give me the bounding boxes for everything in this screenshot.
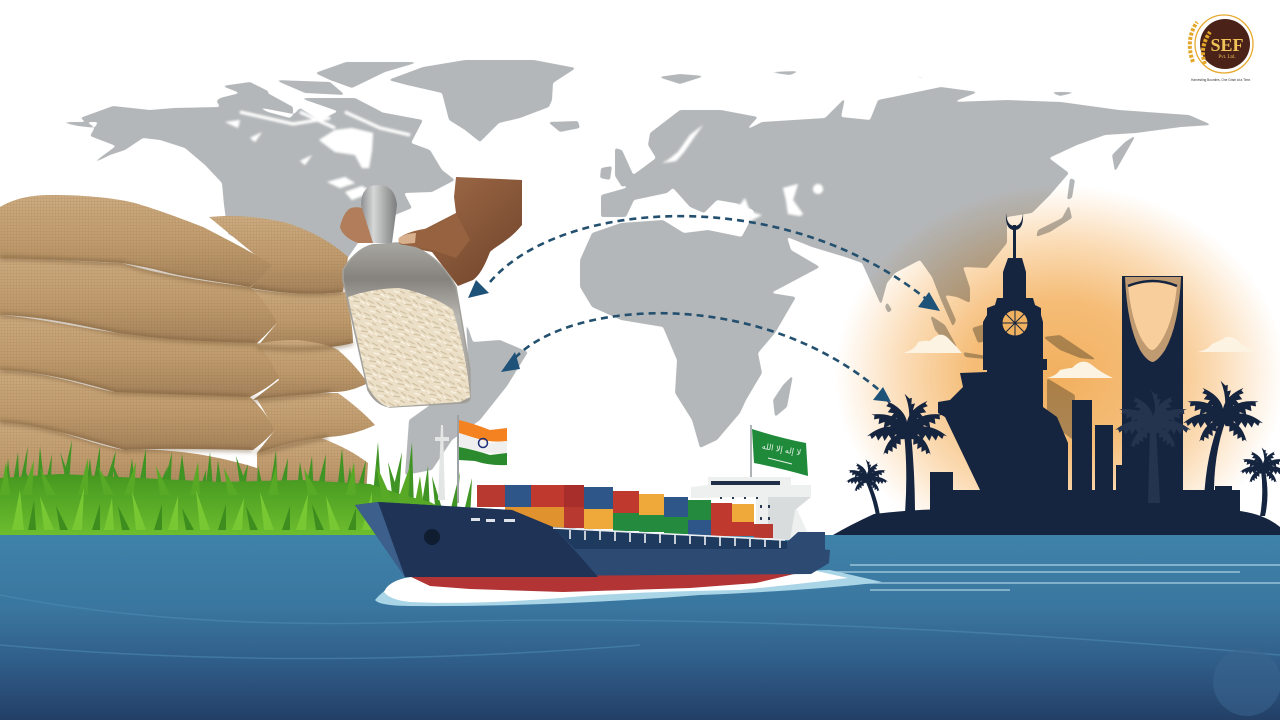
palm large left	[867, 394, 947, 513]
tagline: Harvesting Bounties, One Grain at a Time.	[1191, 78, 1251, 82]
superstructure	[691, 477, 811, 540]
tall blades	[4, 440, 472, 520]
left low block	[930, 472, 953, 510]
world map	[60, 60, 1212, 475]
hand back	[399, 177, 522, 286]
gold ring	[1195, 15, 1253, 73]
palm large right	[1183, 381, 1263, 500]
skyline	[833, 213, 1280, 535]
mast	[435, 425, 449, 500]
Baltic Sea	[662, 125, 703, 163]
wheat	[1190, 22, 1210, 64]
clouds	[903, 335, 1255, 378]
foam	[384, 570, 848, 603]
South America	[405, 322, 528, 475]
cloud left	[903, 335, 962, 353]
cloud middle	[1047, 362, 1113, 378]
Greenland	[388, 60, 576, 142]
Japan	[1036, 178, 1075, 237]
saudi flag	[751, 425, 808, 477]
short blades	[0, 458, 424, 508]
UK and Ireland	[600, 148, 636, 187]
ocean	[0, 535, 1280, 720]
Australia	[1047, 378, 1075, 440]
logo name: SEF	[1210, 35, 1244, 55]
palm small right	[1240, 447, 1280, 516]
grass lower blades	[12, 488, 402, 530]
wake lines	[830, 565, 1280, 590]
sack fold shadows	[0, 258, 353, 453]
sunset glow	[835, 185, 1280, 565]
North America	[60, 100, 455, 262]
Africa	[580, 220, 796, 448]
foam shadow	[375, 570, 882, 606]
Arctic islands	[216, 62, 419, 114]
grass	[0, 440, 472, 535]
arrowhead right upper	[918, 292, 940, 311]
scoop handle	[361, 185, 397, 243]
rice sacks	[0, 195, 375, 495]
palm in tower	[1115, 390, 1191, 503]
Black Sea	[721, 198, 762, 221]
Indonesia islands	[930, 315, 1097, 360]
fingers behind handle	[340, 207, 375, 243]
tall blocks	[1072, 400, 1137, 510]
grass dark strokes	[28, 500, 386, 530]
water bubble	[1213, 648, 1280, 716]
scoop of rice with hand	[340, 177, 522, 407]
Arctic channels	[240, 112, 410, 135]
Hudson Bay	[319, 128, 373, 168]
arrowhead right lower	[873, 387, 891, 402]
dashed route upper	[490, 216, 925, 298]
wave lines	[0, 595, 1280, 658]
scoop body	[343, 243, 470, 407]
turf base	[0, 474, 470, 535]
right low block	[1215, 486, 1232, 512]
containers	[477, 485, 773, 538]
dashed route lower	[515, 313, 885, 395]
back stack	[209, 216, 375, 495]
kingdom tower	[1122, 276, 1183, 500]
clock tower	[938, 213, 1068, 490]
brown disc	[1200, 19, 1250, 69]
hull	[355, 502, 830, 577]
Aral Sea	[813, 184, 823, 194]
Madagascar	[773, 375, 793, 417]
Eurasia	[601, 87, 1212, 327]
Svalbard and arctic Russia	[658, 71, 1078, 96]
thumbnail	[398, 233, 416, 244]
arrow routes	[468, 216, 940, 402]
indian flag	[458, 415, 507, 503]
logo	[1190, 15, 1253, 82]
arrowhead left lower	[501, 352, 520, 372]
red lower hull	[405, 570, 811, 592]
cargo ship	[355, 415, 882, 606]
Iceland	[548, 121, 580, 132]
Sakhalin and Kamchatka	[1112, 135, 1136, 172]
logo sub name: Pvt. Ltd.	[1218, 55, 1236, 60]
Great Lakes	[225, 120, 372, 200]
palm small left	[846, 459, 888, 516]
Sri Lanka	[885, 302, 892, 313]
thumb	[399, 213, 470, 258]
saudi flag: لا إله إلا الله	[761, 442, 802, 458]
Caspian Sea	[783, 184, 803, 216]
cloud right	[1197, 337, 1255, 352]
deck railing	[553, 528, 785, 548]
arrowhead left upper	[468, 280, 489, 298]
stern wheelhouse	[787, 532, 825, 550]
rice	[348, 288, 470, 407]
clock face	[1002, 310, 1028, 336]
base fill	[930, 490, 1072, 515]
island	[833, 509, 1280, 535]
front stack	[0, 195, 279, 495]
